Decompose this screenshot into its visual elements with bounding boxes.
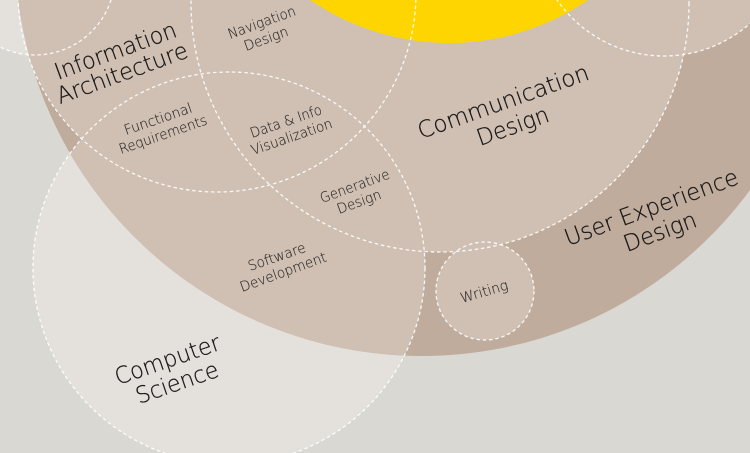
label: User Experience Design: User Experience (561, 165, 742, 252)
label: Navigation Design: Design (242, 24, 291, 55)
overlap fields inside user experience (18, 0, 750, 356)
label: Generative Design: Design (335, 187, 384, 218)
label: Software Development: Software (246, 240, 308, 275)
label: Software Development: Development (238, 250, 329, 296)
label: Information Architecture: Information (51, 17, 180, 86)
label: Generative Design: Generative (318, 167, 392, 207)
circle: user experience design (15, 0, 750, 356)
label: Computer Science: Science (132, 357, 222, 410)
label: Information Architecture: Architecture (53, 38, 192, 110)
label: Navigation Design: Navigation (226, 3, 298, 43)
label: User Experience Design: Design (620, 207, 700, 258)
label: Functional Requirements: Functional (122, 101, 194, 139)
label: Data and Info Visualization: Visualization (249, 116, 335, 159)
label: Computer Science: Computer (111, 330, 224, 391)
circle: small top-left field, outer part (0, 0, 115, 55)
label: Data and Info Visualization: Data & Info (248, 102, 324, 142)
circle: yellow core (203, 0, 695, 43)
label: Communication Design: Communication (414, 60, 593, 145)
label: Writing: Writing (459, 278, 510, 307)
circle: computer science, outer part (33, 72, 425, 453)
label: Functional Requirements: Requirements (117, 113, 209, 158)
label: Communication Design: Design (473, 102, 553, 152)
